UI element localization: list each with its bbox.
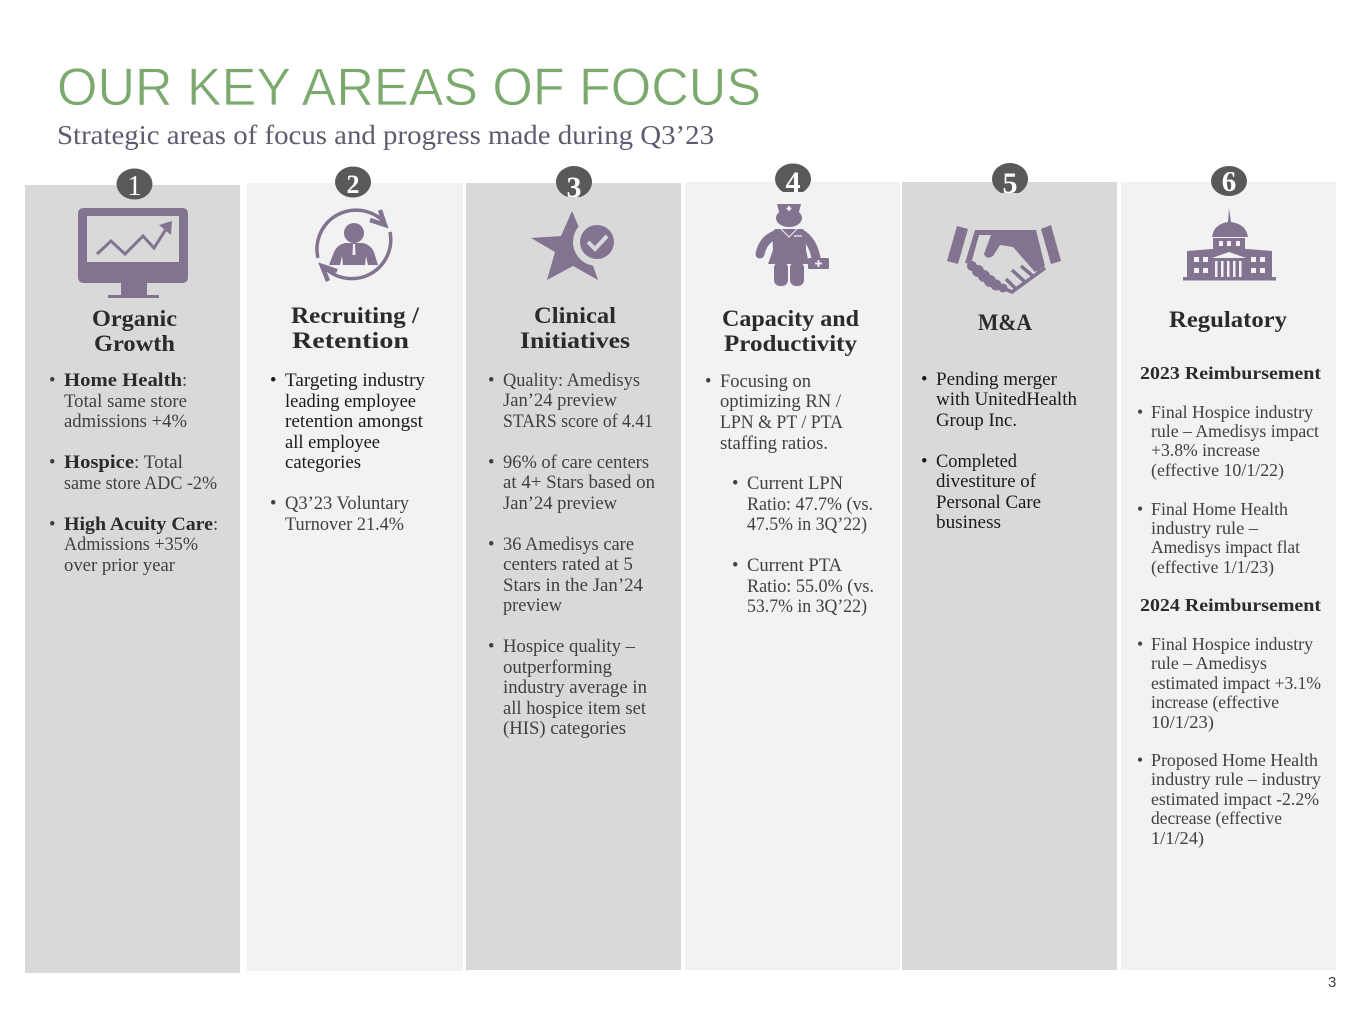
heading: [722, 306, 859, 357]
reimbursement list: •: [1137, 499, 1143, 519]
reimbursement list: •: [1137, 634, 1143, 654]
reimbursement list: industry rule – industry: [1151, 769, 1321, 789]
bullet list: staffing ratios.: [720, 434, 828, 454]
bullet list: industry average in: [503, 678, 647, 698]
number badge 4: 4: [786, 166, 800, 199]
bullet list: •: [270, 371, 276, 391]
reimbursement list: increase (effective: [1151, 692, 1279, 712]
heading: Capacity and: [722, 306, 859, 332]
panel background: [685, 182, 900, 970]
reimbursement list: •: [1137, 402, 1143, 422]
bullet list: •: [488, 371, 494, 391]
bullet list: Pending merger: [936, 370, 1057, 390]
bullet list: •: [488, 637, 494, 657]
number badge 2: 2: [346, 170, 360, 199]
icon: nurse with medical bag: [760, 204, 829, 286]
reimbursement list: industry rule –: [1151, 518, 1258, 538]
page number: 3: [1328, 974, 1336, 991]
number badge 6: [1211, 166, 1247, 198]
bullet list: •: [732, 474, 738, 494]
heading: Organic: [92, 306, 177, 332]
bullet list: over prior year: [64, 556, 175, 576]
bullet list: 36 Amedisys care: [503, 535, 634, 555]
bullet list: •: [488, 453, 494, 473]
bullet list: outperforming: [503, 658, 612, 678]
bullet list: Quality: Amedisys: [503, 371, 640, 391]
icon: monitor with rising chart: [78, 208, 188, 298]
title: OUR KEY AREAS OF FOCUS: [57, 58, 761, 117]
bullet list: all hospice item set: [503, 699, 647, 719]
number badge 5: [992, 163, 1028, 193]
bullet list: leading employee: [285, 392, 416, 412]
reimbursement list: (effective 10/1/22): [1151, 460, 1284, 480]
panel background: [902, 182, 1117, 970]
heading: [291, 303, 419, 354]
number badge 3: [556, 166, 592, 197]
bullet list: Focusing on: [720, 372, 811, 392]
bullet list: Stars in the Jan’24: [503, 576, 643, 596]
subtitle: Strategic areas of focus and progress made during Q3’23: [57, 120, 714, 150]
bullet list: •: [921, 370, 927, 390]
panel: capacity and productivity: [685, 164, 900, 970]
bullet list: LPN & PT / PTA: [720, 413, 844, 433]
bullet list: •: [270, 494, 276, 514]
reimbursement list: 1/1/24): [1151, 828, 1204, 848]
panel: organic growth: [25, 168, 240, 973]
bullet list: divestiture of: [936, 472, 1037, 492]
panel background: [466, 183, 681, 970]
panel: regulatory: [1121, 166, 1336, 970]
reimbursement list: 10/1/23): [1151, 712, 1214, 732]
reimbursement list: Proposed Home Health: [1151, 750, 1318, 770]
bullet list: •: [488, 535, 494, 555]
bullet list: same store ADC -2%: [64, 474, 217, 494]
icon: star with check mark: [531, 211, 621, 280]
reimbursement list: rule – Amedisys impact: [1151, 421, 1319, 441]
bullet list: Turnover 21.4%: [285, 515, 404, 535]
bullet list: •: [49, 515, 55, 535]
bullet list: all employee: [285, 433, 380, 453]
reimbursement list: Amedisys impact flat: [1151, 537, 1300, 557]
bullet list: retention amongst: [285, 412, 424, 432]
reimbursement list: estimated impact +3.1%: [1151, 673, 1321, 693]
panel background: [25, 185, 240, 973]
bullet list: 96% of care centers: [503, 453, 649, 473]
bullet list: categories: [285, 453, 361, 473]
bullet list: Hospice quality –: [503, 637, 636, 657]
bullet list: Q3’23 Voluntary: [285, 494, 410, 514]
bullet list: 47.5% in 3Q’22): [747, 515, 867, 535]
bullet list: Hospice: [64, 453, 134, 473]
bullet list: Group Inc.: [936, 411, 1017, 431]
bullet list: Completed: [936, 452, 1018, 472]
panel: M&A: [902, 163, 1117, 970]
bullet list: •: [49, 453, 55, 473]
reimbursement list: Final Hospice industry: [1151, 402, 1313, 422]
bullet list: Admissions +35%: [64, 535, 198, 555]
bullet list: centers rated at 5: [503, 555, 633, 575]
heading: [520, 303, 630, 354]
reimbursement list: Final Hospice industry: [1151, 634, 1313, 654]
number badge 4: [775, 164, 811, 192]
bullet list: : Total: [134, 453, 183, 473]
bullet list: High Acuity Care: [64, 515, 213, 535]
icon: capitol building: [1183, 208, 1276, 280]
heading: Initiatives: [520, 328, 630, 354]
bullet list: optimizing RN /: [720, 392, 842, 412]
number badge 5: 5: [1002, 167, 1018, 200]
bullet list: [705, 372, 874, 617]
bullet list: Targeting industry: [285, 371, 426, 391]
bullet list: :: [182, 371, 187, 391]
reimbursement list: rule – Amedisys: [1151, 653, 1267, 673]
icon: person with circular arrows: [317, 210, 391, 281]
bullet list: 53.7% in 3Q’22): [747, 597, 867, 617]
heading: Recruiting /: [291, 303, 419, 329]
bullet list: Ratio: 47.7% (vs.: [747, 495, 873, 515]
bullet list: Ratio: 55.0% (vs.: [747, 577, 874, 597]
heading: Productivity: [724, 331, 857, 357]
heading: Clinical: [534, 303, 616, 329]
panel: recruiting and retention: [247, 166, 463, 971]
bullet list: [921, 370, 1077, 533]
reimbursement list: estimated impact -2.2%: [1151, 789, 1319, 809]
bullet list: Jan’24 preview: [503, 494, 618, 514]
number badge 3: 3: [566, 171, 582, 204]
panel background: [1121, 182, 1336, 970]
number badge 2: [335, 166, 371, 199]
bullet list: Personal Care: [936, 493, 1041, 513]
reimbursement list: Final Home Health: [1151, 499, 1288, 519]
bullet list: [49, 371, 218, 576]
bullet list: :: [213, 515, 218, 535]
reimbursement list: decrease (effective: [1151, 808, 1282, 828]
reimbursement list: (effective 1/1/23): [1151, 557, 1274, 577]
heading: Retention: [292, 328, 409, 354]
reimbursement list: +3.8% increase: [1151, 440, 1260, 460]
bullet list: admissions +4%: [64, 412, 187, 432]
bullet list: •: [705, 372, 711, 392]
bullet list: Current PTA: [747, 556, 843, 576]
bullet list: •: [921, 452, 927, 472]
heading: Regulatory: [1169, 307, 1287, 333]
heading: M&A: [978, 310, 1032, 336]
bullet list: [270, 371, 426, 535]
panel background: [247, 183, 463, 971]
bullet list: •: [49, 371, 55, 391]
reimbursement list: 2023 Reimbursement: [1140, 363, 1321, 383]
bullet list: (HIS) categories: [503, 719, 626, 739]
bullet list: •: [732, 556, 738, 576]
bullet list: business: [936, 513, 1001, 533]
reimbursement list: •: [1137, 750, 1143, 770]
reimbursement list: 2024 Reimbursement: [1140, 595, 1321, 615]
panel: clinical initiatives: [466, 166, 681, 970]
bullet list: STARS score of 4.41: [503, 412, 653, 432]
bullet list: with UnitedHealth: [936, 390, 1077, 410]
bullet list: Jan’24 preview: [503, 391, 618, 411]
number badge 1: 1: [127, 170, 142, 202]
reimbursement list: [1137, 363, 1321, 848]
heading: Growth: [94, 331, 175, 357]
bullet list: preview: [503, 596, 563, 616]
number badge 6: 6: [1222, 166, 1236, 198]
heading: [92, 306, 177, 357]
icon: handshake: [947, 225, 1061, 292]
bullet list: [488, 371, 655, 739]
bullet list: Current LPN: [747, 474, 843, 494]
bullet list: Total same store: [64, 392, 187, 412]
bullet list: at 4+ Stars based on: [503, 473, 655, 493]
number badge 1: [116, 168, 152, 202]
bullet list: Home Health: [64, 371, 183, 391]
